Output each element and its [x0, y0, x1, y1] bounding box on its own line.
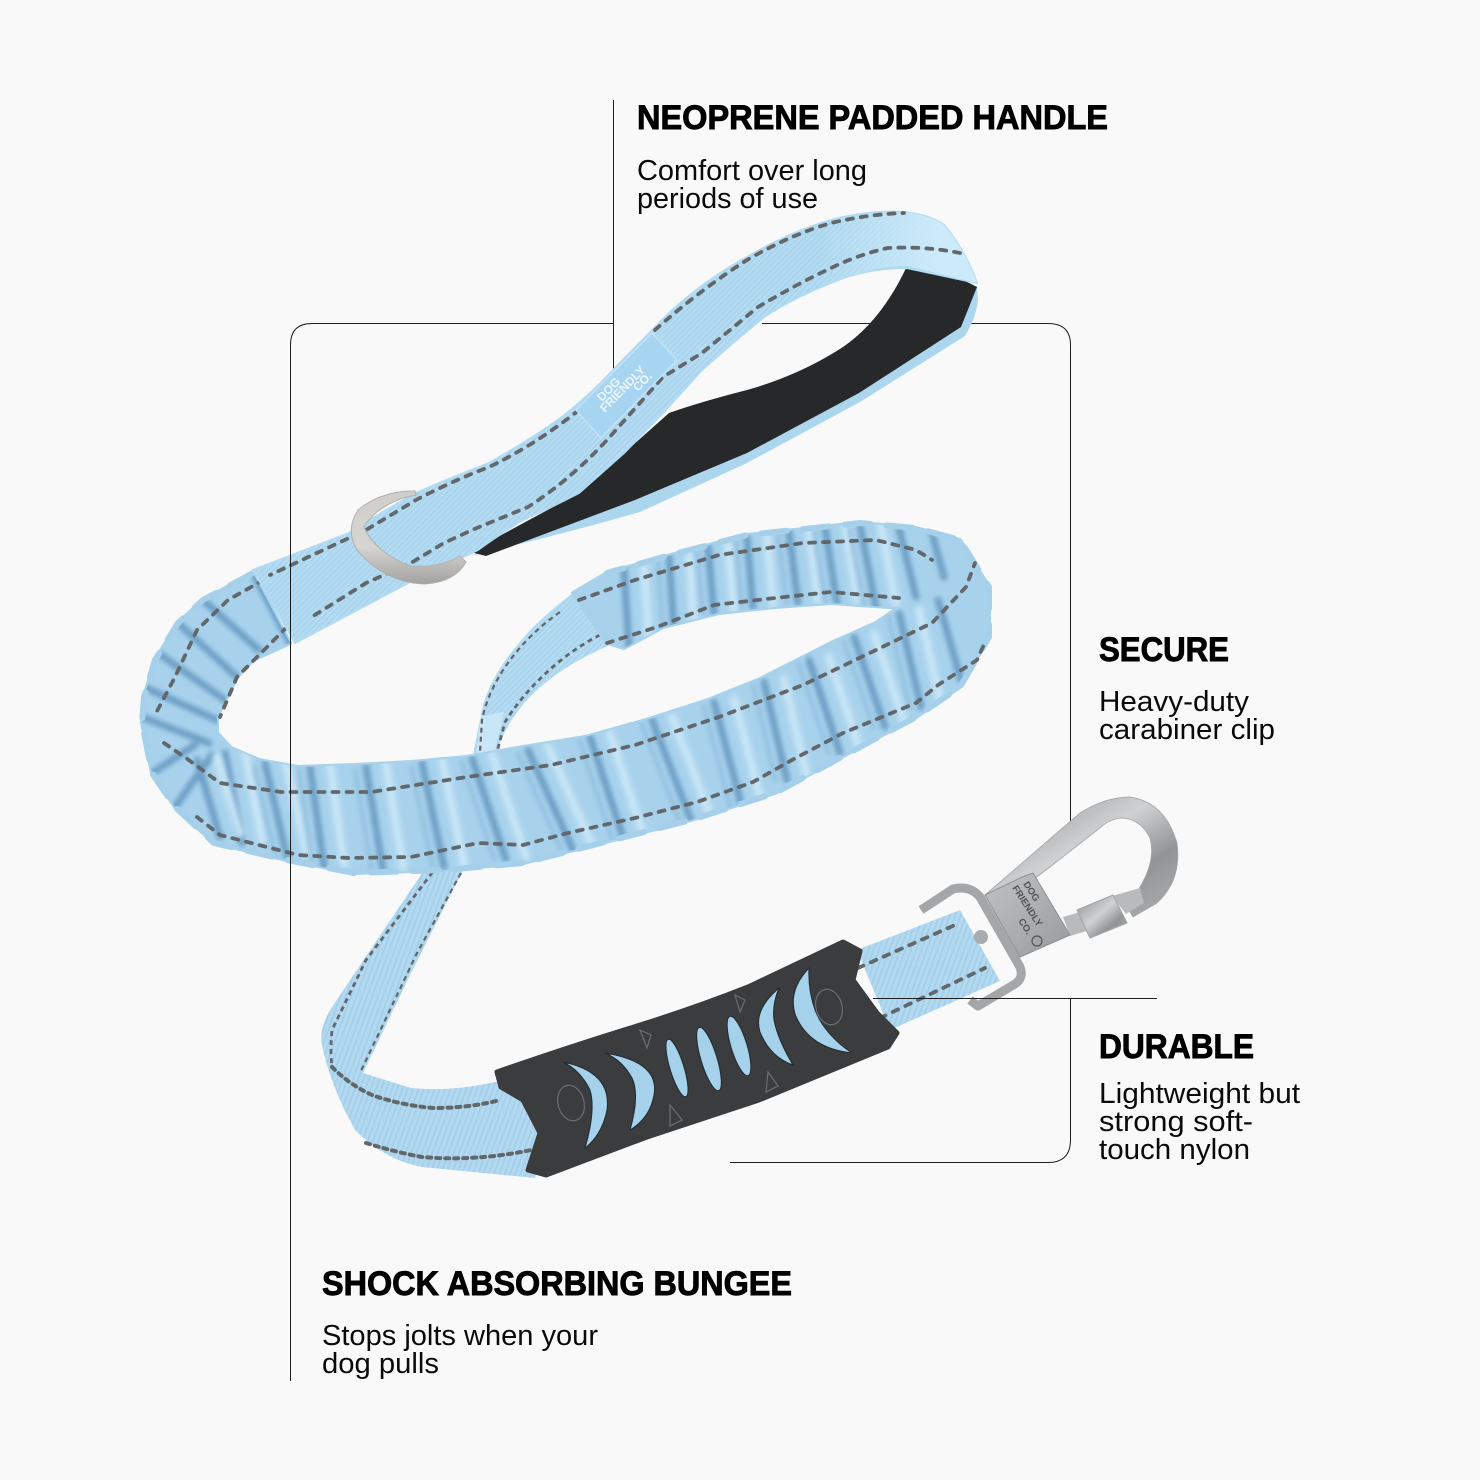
text block: durable	[1099, 1028, 1300, 1166]
description: carabiner clip	[1099, 714, 1275, 746]
description: Comfort over long	[637, 155, 867, 187]
callout line: secure and frame right side	[762, 324, 1070, 838]
strap between grip and buckle	[857, 910, 1000, 1030]
infographic canvas	[139, 100, 1300, 1381]
brand patch: FRIENDLY	[597, 363, 648, 415]
callout line: shock absorbing bungee frame	[290, 324, 614, 1381]
swivel bolt	[974, 930, 988, 944]
text block: secure	[1099, 631, 1275, 746]
swivel body: DOG	[1020, 880, 1041, 904]
brand patch	[576, 333, 677, 438]
callout line: durable	[730, 998, 1157, 1162]
leash illustration	[142, 212, 1178, 1178]
description	[1099, 686, 1275, 746]
grip ovals and triangles	[554, 986, 846, 1126]
padded handle neoprene lining	[470, 266, 978, 556]
lower strap: upper section behind bungee	[472, 593, 610, 760]
gate barrel	[1077, 895, 1127, 938]
grip cut-outs	[563, 968, 852, 1148]
description: Heavy-duty	[1099, 686, 1250, 718]
heading: DURABLE	[1099, 1028, 1254, 1066]
bungee shock absorber section	[142, 522, 989, 873]
swivel body	[985, 873, 1070, 957]
brand patch: DOG	[594, 375, 623, 404]
hook	[985, 797, 1178, 917]
description	[637, 155, 867, 215]
heading: SECURE	[1099, 631, 1229, 669]
carabiner clip	[921, 797, 1178, 1006]
heading: NEOPRENE PADDED HANDLE	[637, 99, 1108, 137]
description: touch nylon	[1099, 1134, 1250, 1166]
rectangular buckle	[921, 888, 1021, 1006]
description	[1099, 1078, 1300, 1166]
brand patch: CO.	[630, 369, 655, 394]
description: strong soft-	[1099, 1106, 1253, 1138]
rubber grip	[497, 942, 897, 1175]
gate pin	[1063, 888, 1144, 936]
description: periods of use	[637, 183, 818, 215]
description: dog pulls	[322, 1348, 439, 1380]
text block: shock absorbing bungee	[322, 1265, 792, 1380]
description: Lightweight but	[1099, 1078, 1300, 1110]
text block: neoprene padded handle	[637, 99, 1108, 215]
callout line: handle	[612, 100, 614, 370]
bungee stitching	[155, 540, 986, 858]
padded handle webbing	[253, 212, 977, 643]
D-ring	[351, 491, 466, 584]
handle stitching	[655, 213, 904, 330]
lower strap: loop below bungee	[321, 860, 560, 1178]
swivel body: CO.	[1015, 917, 1034, 937]
bungee scalloped edges	[142, 523, 989, 873]
swivel body: FRIENDLY	[1009, 884, 1044, 929]
heading: SHOCK ABSORBING BUNGEE	[322, 1265, 792, 1303]
description: Stops jolts when your	[322, 1320, 598, 1352]
description	[322, 1320, 598, 1380]
